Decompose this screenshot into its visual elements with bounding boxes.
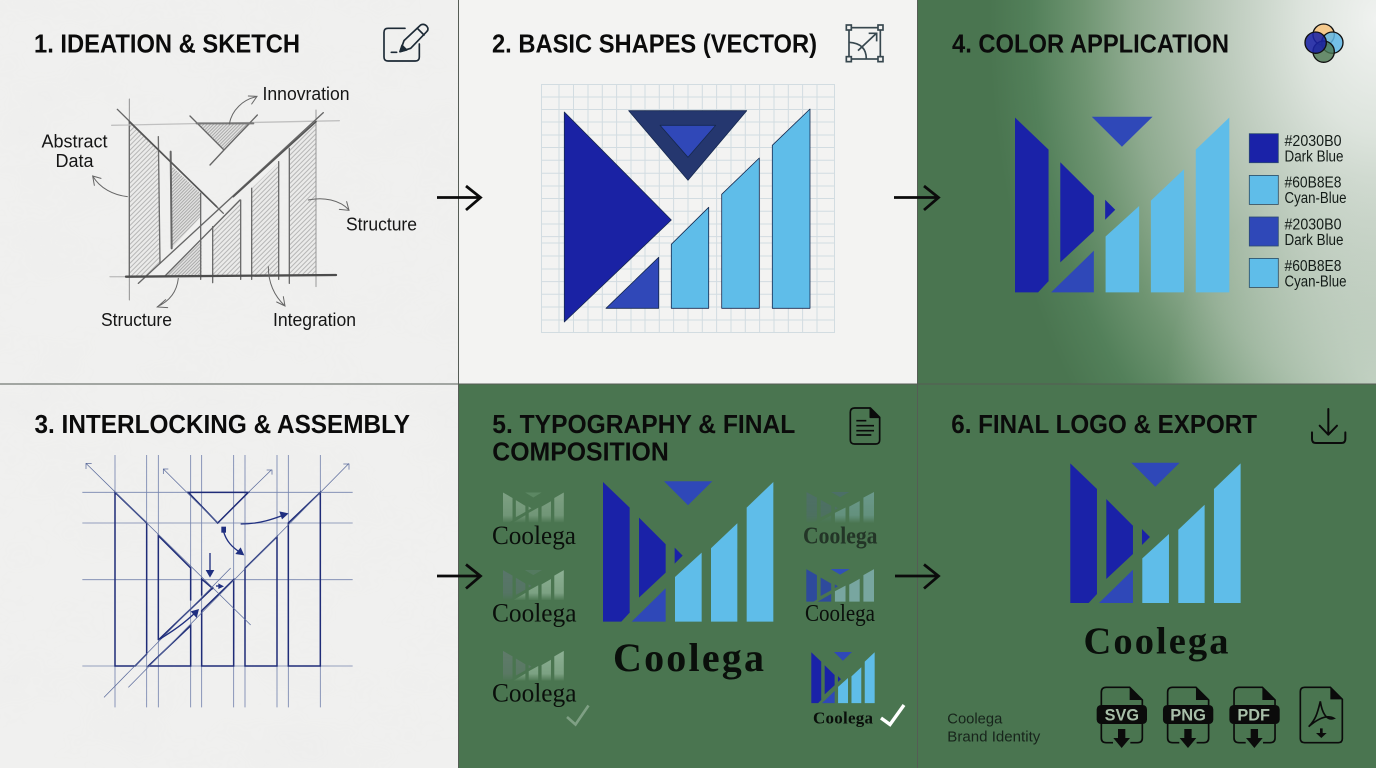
icon: PNG file: PNG bbox=[1170, 705, 1206, 724]
logo variant: right two bbox=[805, 569, 875, 627]
heading: 2. BASIC SHAPES (VECTOR) bbox=[492, 28, 817, 58]
arrow: step 5 to step 6 bbox=[895, 564, 938, 588]
panel background bbox=[0, 384, 458, 768]
arrow: step 1 to step 2 bbox=[437, 186, 480, 210]
selected check mark bbox=[881, 705, 904, 724]
swatch: cyan blue second bbox=[1249, 258, 1346, 290]
panel: 2 basic shapes bbox=[458, 0, 918, 384]
logo outlines bbox=[115, 492, 320, 666]
icon: SVG file: SVG bbox=[1105, 705, 1139, 724]
arrow: step 2 to step 4 bbox=[894, 186, 938, 210]
logo variant: right two: Coolega bbox=[805, 601, 875, 627]
icon: download bbox=[1312, 409, 1345, 443]
logo variant: left one bbox=[492, 492, 576, 550]
swatch: cyan blue second: Cyan-Blue bbox=[1284, 273, 1346, 290]
label: Abstract Data: Abstract bbox=[41, 132, 108, 152]
wordmark: Coolega bbox=[1084, 620, 1228, 662]
arrow: step 3 to step 5 bbox=[437, 564, 480, 588]
logo variant: left three: Coolega bbox=[492, 678, 577, 708]
brand caption bbox=[947, 710, 1041, 746]
heading: 5. TYPOGRAPHY & FINAL bbox=[492, 409, 795, 439]
icon: SVG file bbox=[1097, 687, 1147, 748]
icon: vector bounding box bbox=[846, 25, 883, 62]
icon: document bbox=[850, 408, 880, 444]
swatch: medium blue bbox=[1249, 216, 1344, 249]
logo variant: left one: Coolega bbox=[492, 521, 576, 550]
icon: PNG file bbox=[1163, 687, 1213, 748]
construction diagram bbox=[82, 455, 353, 707]
logo variant: left two: Coolega bbox=[492, 598, 577, 628]
panel: 6 final logo and export bbox=[918, 384, 1376, 768]
vector shapes bbox=[564, 109, 810, 322]
brand caption: Coolega bbox=[947, 710, 1003, 728]
wordmark: Coolega bbox=[613, 635, 764, 680]
colored logo bbox=[1015, 117, 1229, 292]
panel background bbox=[458, 0, 918, 384]
hatched shapes bbox=[129, 122, 316, 277]
heading bbox=[492, 409, 795, 467]
logo variant: right one: Coolega bbox=[803, 524, 878, 550]
swatch: dark blue: Dark Blue bbox=[1284, 148, 1344, 166]
panel: 5 typography and final composition bbox=[459, 384, 918, 768]
brand caption: Brand Identity bbox=[947, 728, 1041, 746]
logo variant: selected bbox=[811, 652, 875, 728]
panel: 3 interlocking and assembly bbox=[0, 384, 458, 768]
panel background bbox=[918, 384, 1376, 768]
swatch: medium blue: Dark Blue bbox=[1284, 232, 1344, 249]
heading: 4. COLOR APPLICATION bbox=[952, 28, 1229, 58]
extended diagonals with arrow tips bbox=[86, 463, 349, 697]
corner light wash bbox=[918, 0, 1376, 384]
panel background bbox=[459, 384, 918, 768]
icon: PDF file: PDF bbox=[1237, 705, 1270, 724]
main logo bbox=[603, 481, 773, 622]
logo variant: selected: Coolega bbox=[813, 708, 874, 728]
logo variant: left two bbox=[492, 570, 577, 628]
label: Integration: Integration bbox=[273, 310, 356, 330]
panel background bbox=[918, 0, 1376, 384]
final logo bbox=[1070, 463, 1241, 603]
label: Abstract Data: Data bbox=[55, 151, 94, 171]
panel background bbox=[0, 0, 458, 384]
pencil sketch of logo bbox=[110, 99, 339, 300]
heading: 1. IDEATION & SKETCH bbox=[34, 28, 300, 58]
guide lines bbox=[82, 455, 353, 707]
swatch: cyan blue: Cyan-Blue bbox=[1284, 190, 1346, 207]
heading: 3. INTERLOCKING & ASSEMBLY bbox=[34, 409, 410, 439]
swatch: medium blue: #2030B0 bbox=[1284, 216, 1342, 233]
swatch: dark blue: #2030B0 bbox=[1284, 133, 1342, 150]
paper texture bbox=[0, 384, 458, 768]
panel: 1 ideation and sketch bbox=[0, 0, 458, 384]
color palette legend bbox=[1249, 133, 1346, 290]
faint check mark bbox=[567, 706, 588, 724]
icon: PDF file bbox=[1229, 687, 1280, 748]
panel: 4 color application bbox=[918, 0, 1376, 384]
label: Innovration: Innovration bbox=[262, 84, 350, 104]
construction strokes bbox=[110, 99, 339, 300]
icon: color circles bbox=[1305, 24, 1343, 62]
arrows to sketch labels bbox=[93, 96, 349, 308]
swatch: dark blue bbox=[1249, 133, 1344, 166]
swatch: cyan blue bbox=[1249, 175, 1346, 207]
swatch: cyan blue: #60B8E8 bbox=[1284, 175, 1342, 192]
assembly arrows bbox=[160, 514, 287, 639]
logo variant: right one bbox=[803, 492, 878, 550]
label: Structure bottom: Structure bbox=[101, 310, 172, 330]
heading: 6. FINAL LOGO & EXPORT bbox=[951, 409, 1257, 439]
label: Structure right: Structure bbox=[346, 214, 417, 234]
paper texture bbox=[0, 0, 458, 384]
grid bbox=[542, 84, 834, 332]
icon: acrobat document bbox=[1300, 687, 1342, 743]
logo variant: left three bbox=[492, 651, 577, 708]
swatch: cyan blue second: #60B8E8 bbox=[1284, 258, 1342, 275]
heading: COMPOSITION bbox=[492, 437, 669, 467]
icon: pencil editing bbox=[384, 24, 428, 61]
